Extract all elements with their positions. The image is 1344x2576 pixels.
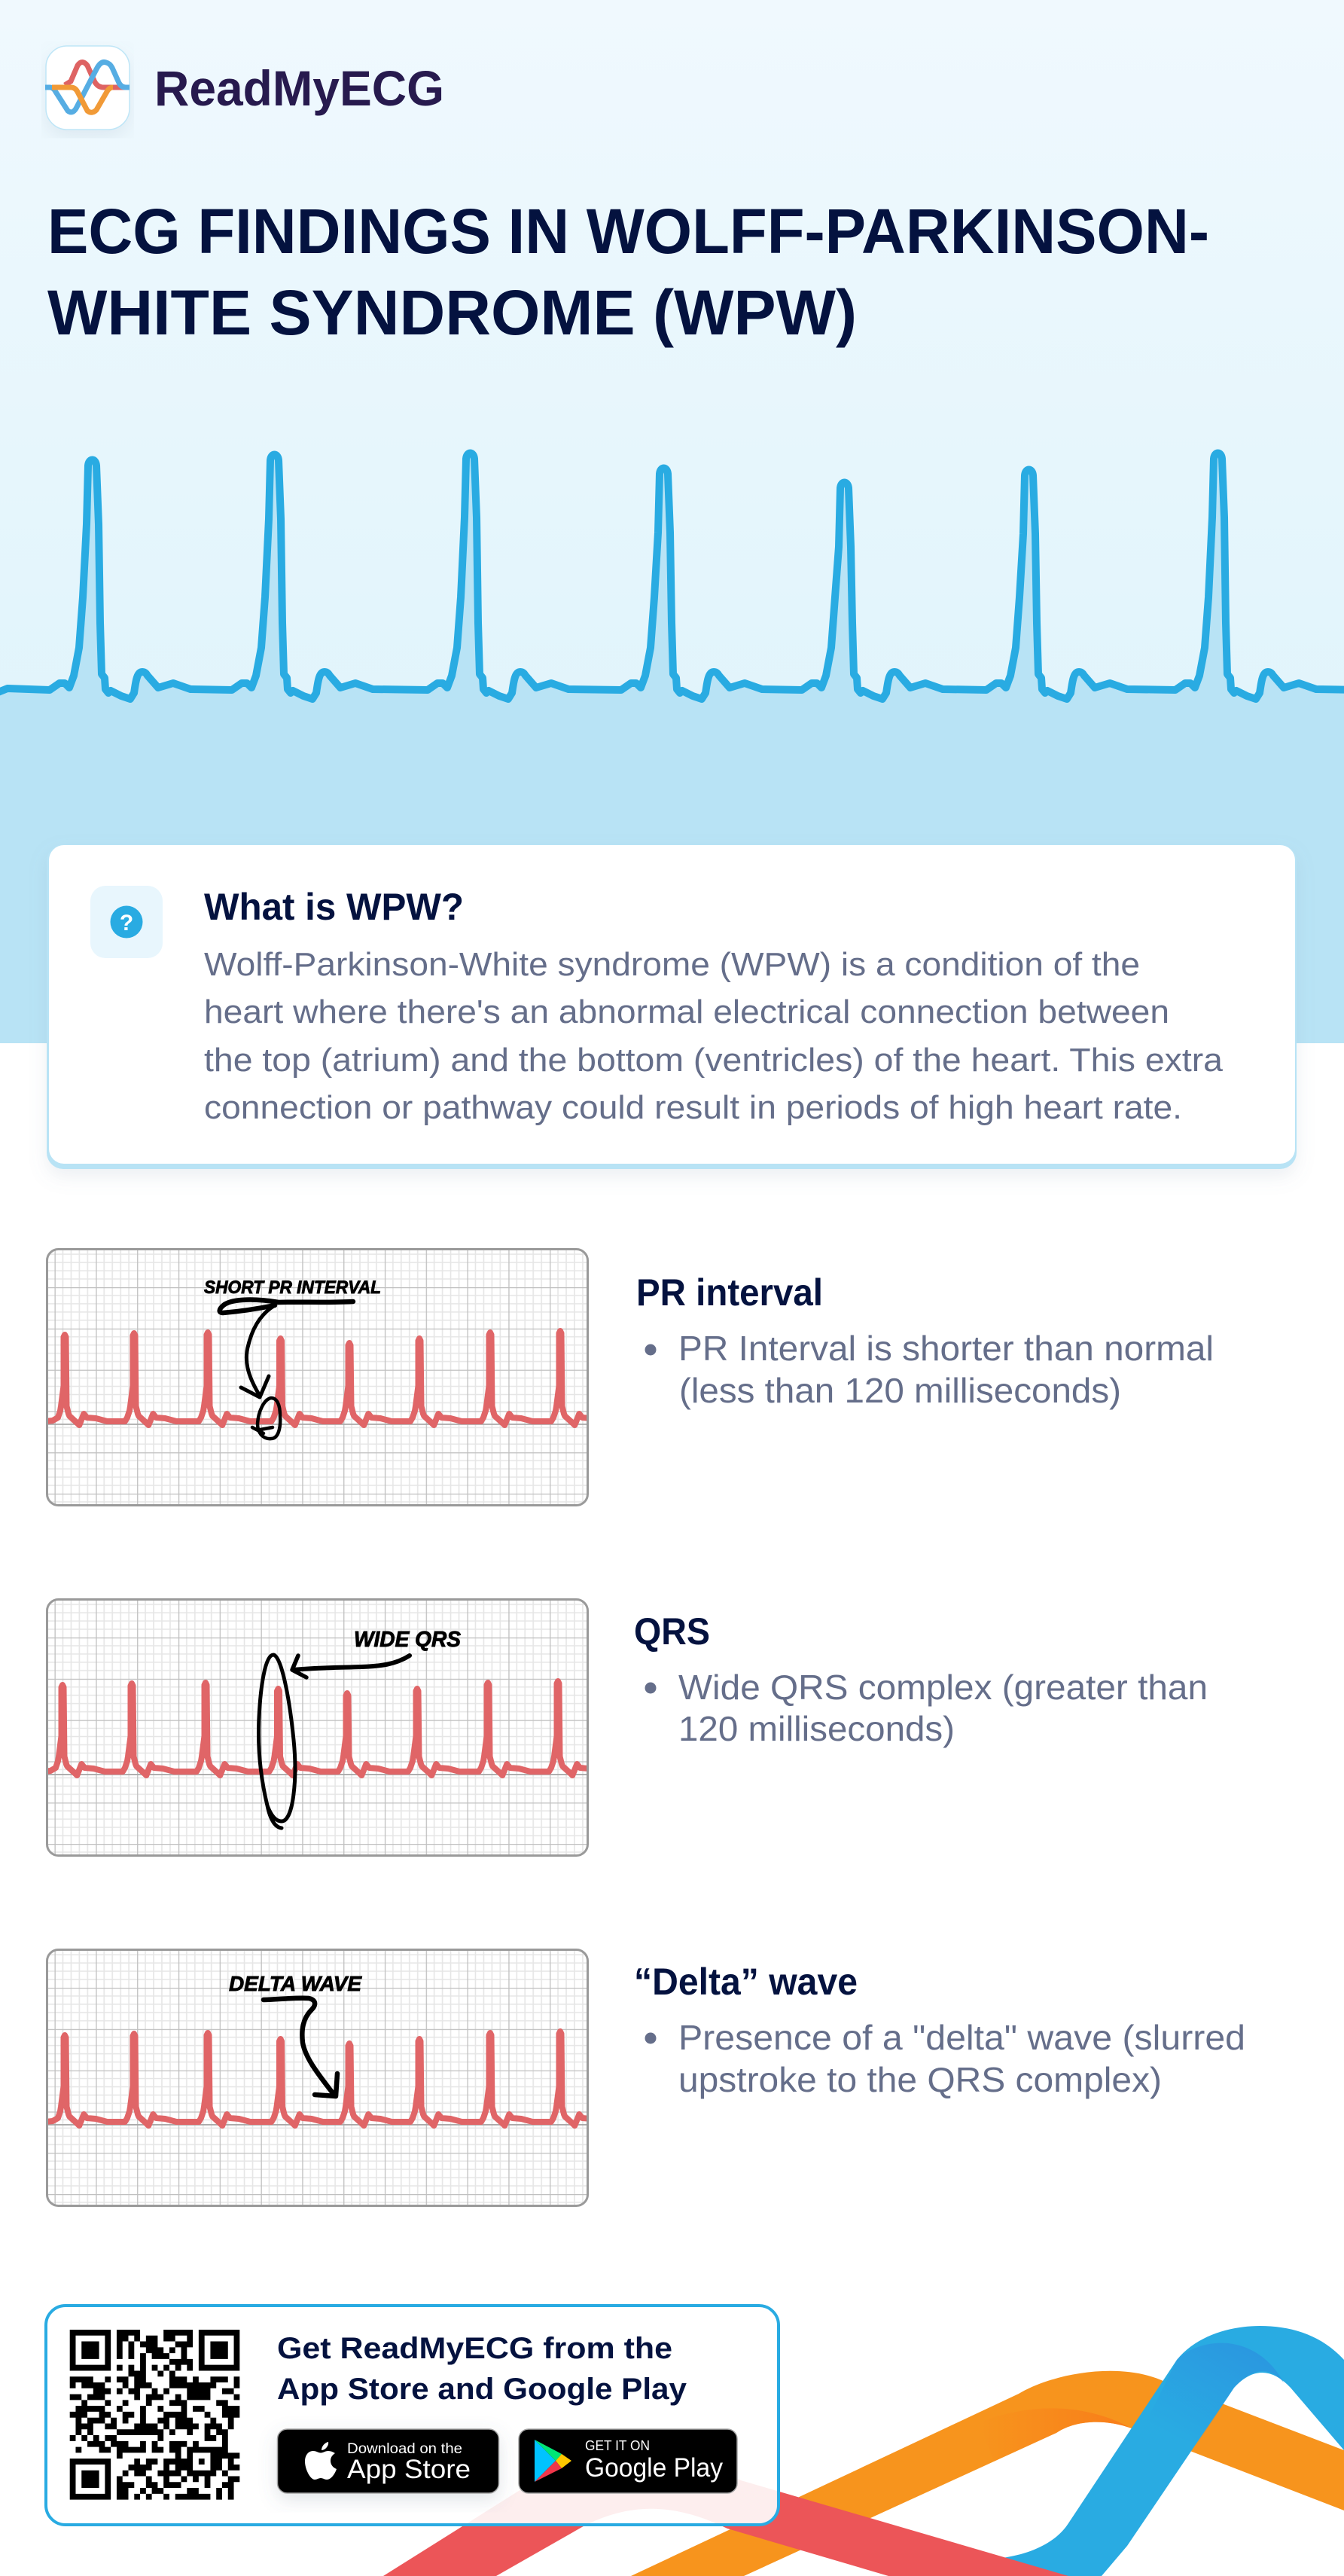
annotation label: delta wave: DELTA WAVE — [229, 1972, 362, 1995]
annotation arrow and circle: wide QRS — [258, 1655, 410, 1828]
chart: short PR interval ECG strip — [45, 1249, 602, 1506]
icon: question mark: ? — [120, 911, 133, 935]
App Store badge — [277, 2429, 498, 2493]
hero background — [0, 0, 1344, 753]
PR interval text: PR Interval is shorter than normal — [678, 1329, 1214, 1368]
PR interval text: PR interval — [636, 1271, 823, 1314]
QRS text: QRS — [634, 1610, 710, 1653]
annotation label: wide QRS: WIDE QRS — [354, 1628, 462, 1652]
decorative ribbons — [383, 2326, 1344, 2576]
icon: question mark — [90, 886, 163, 958]
card body text: the top (atrium) and the bottom (ventricles) of the heart. This extra — [204, 1042, 1224, 1079]
icon: play triangle — [535, 2440, 571, 2482]
download heading: Get ReadMyECG from the — [277, 2332, 672, 2365]
QR code — [70, 2330, 239, 2500]
delta wave text: Presence of a "delta" wave (slurred — [678, 2018, 1245, 2057]
delta wave text: upstroke to the QRS complex) — [678, 2060, 1162, 2099]
chart: delta wave ECG strip — [45, 1949, 602, 2207]
title: ECG FINDINGS IN WOLFF-PARKINSON- — [47, 196, 1209, 267]
PR interval text — [636, 1271, 1214, 1410]
Google Play badge: GET IT ON — [585, 2438, 650, 2453]
brand name: ReadMyECG — [154, 60, 444, 116]
hero ECG waveform — [0, 453, 1344, 1070]
annotation label: short PR interval: SHORT PR INTERVAL — [204, 1277, 381, 1298]
delta wave text — [634, 1961, 1245, 2099]
chart: wide QRS ECG strip — [43, 1599, 600, 1857]
panel: app download — [46, 2306, 779, 2525]
card body text: connection or pathway could result in periods of high heart rate. — [204, 1089, 1182, 1126]
card body text: heart where there's an abnormal electrical connection between — [204, 993, 1169, 1030]
title: WHITE SYNDROME (WPW) — [47, 277, 857, 348]
download heading — [277, 2332, 687, 2406]
icon: apple — [305, 2442, 337, 2480]
icon: ReadMyECG app logo — [45, 46, 130, 130]
annotation arrow: delta wave — [264, 1998, 337, 2096]
panel: What is WPW — [47, 844, 1297, 1169]
QRS text — [634, 1610, 1208, 1748]
Google Play badge — [519, 2429, 737, 2493]
card heading: What is WPW? — [204, 886, 464, 928]
Google Play badge: Google Play — [585, 2453, 723, 2483]
title — [47, 196, 1209, 348]
card body text: Wolff-Parkinson-White syndrome (WPW) is a condition of the — [204, 946, 1140, 983]
App Store badge: Download on the — [347, 2441, 462, 2457]
App Store badge: App Store — [347, 2455, 471, 2484]
download heading: App Store and Google Play — [277, 2373, 687, 2406]
annotation arrow and circle: PR interval — [220, 1300, 353, 1439]
QRS text: 120 milliseconds) — [678, 1709, 955, 1748]
delta wave text: “Delta” wave — [634, 1961, 858, 2003]
card body text — [204, 946, 1224, 1126]
PR interval text: (less than 120 milliseconds) — [679, 1371, 1121, 1410]
logo — [45, 46, 444, 130]
QRS text: Wide QRS complex (greater than — [678, 1668, 1208, 1707]
